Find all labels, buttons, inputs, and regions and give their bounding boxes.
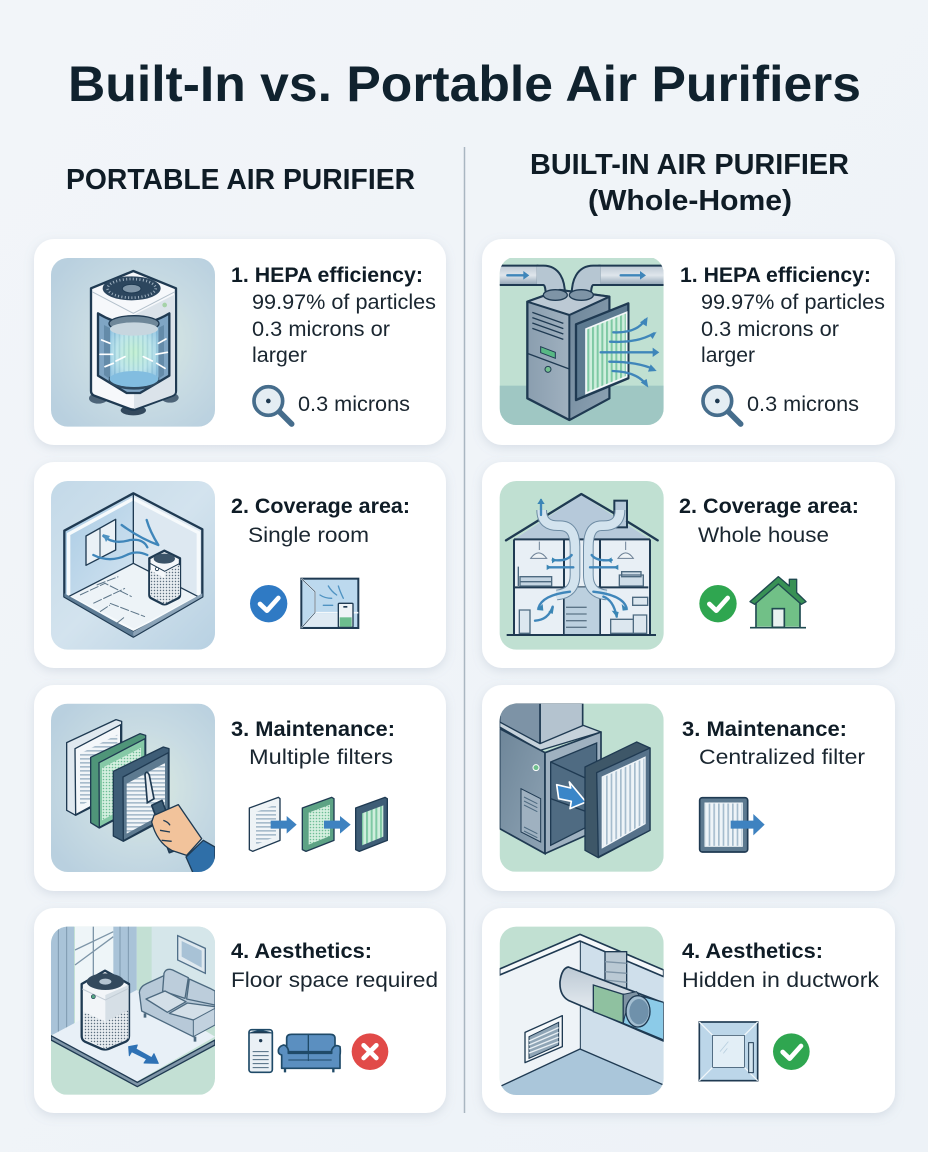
text: maintenance: Centralized filter [699,745,865,769]
text: HEPA efficiency: larger [701,343,755,367]
icon: green check [773,1033,810,1070]
icon: three filter sequence with arrows [249,797,387,851]
icon: room with purifier [301,579,358,628]
panel: built-in maintenance [482,685,895,891]
text: aesthetics: 4. Aesthetics: [231,939,372,963]
text: aesthetics [682,939,879,992]
text: coverage area [679,494,859,547]
text: maintenance [682,717,865,769]
panel: portable HEPA efficiency [34,239,446,445]
illustration: furnace with HEPA filter and ducts [500,258,664,427]
text: aesthetics: Hidden in ductwork [682,968,879,992]
text: maintenance: 3. Maintenance: [682,717,847,741]
text: coverage area: 2. Coverage area: [679,494,859,518]
heading: portable column: PORTABLE AIR PURIFIER [66,164,415,196]
text: aesthetics: Floor space required [231,968,438,992]
text: HEPA efficiency [680,263,885,416]
text: HEPA efficiency: 0.3 microns or [252,317,390,341]
icon: green check [699,585,737,622]
panel: built-in HEPA efficiency [482,239,895,445]
icon: magnifying glass [703,387,741,424]
icon: red cross [352,1033,388,1070]
illustration: single room with purifier [51,481,215,650]
illustration: portable purifier with glowing filter [51,258,215,427]
text: HEPA efficiency: 0.3 microns or [701,317,839,341]
text: coverage area [231,494,410,547]
text: maintenance: Multiple filters [249,745,393,769]
icon: purifier and sofa [249,1030,340,1072]
text: maintenance [231,717,395,769]
icon: filter with arrow [700,798,765,852]
text: HEPA efficiency: 1. HEPA efficiency: [231,263,423,287]
text: coverage area: 2. Coverage area: [231,494,410,518]
heading: built-in column [530,149,849,217]
text: HEPA efficiency: 0.3 microns [298,392,410,416]
text: HEPA efficiency: 99.97% of particles [701,290,885,314]
text: HEPA efficiency: larger [252,343,307,367]
panel: built-in coverage area [482,462,895,668]
text: HEPA efficiency: 0.3 microns [747,392,859,416]
illustration: living room with purifier on floor [51,926,215,1095]
text: HEPA efficiency: 1. HEPA efficiency: [680,263,871,287]
panel: built-in aesthetics [482,908,895,1113]
panel: portable maintenance [34,685,446,891]
icon: magnifying glass [254,387,292,424]
panel: portable aesthetics [34,908,446,1113]
panel: portable coverage area [34,462,446,668]
text: maintenance: 3. Maintenance: [231,717,395,741]
heading: built-in column: BUILT-IN AIR PURIFIER [530,149,849,181]
text: aesthetics: 4. Aesthetics: [682,939,823,963]
heading: built-in column: (Whole-Home) [588,185,792,217]
illustration: filter hidden in ductwork [500,926,665,1095]
icon: green house [750,577,806,628]
text: HEPA efficiency: 99.97% of particles [252,290,436,314]
icon: hidden ceiling vent [699,1022,758,1081]
text: aesthetics [231,939,438,992]
illustration: house cross-section with ducts [500,481,664,650]
text: coverage area: Single room [248,523,369,547]
title: Built-In vs. Portable Air Purifiers [68,56,861,112]
illustration: multiple filters and screwdriver [51,704,215,874]
text: HEPA efficiency [231,263,436,416]
icon: blue check [250,585,287,622]
illustration: furnace with centralized filter slot [500,703,664,872]
text: coverage area: Whole house [698,523,829,547]
